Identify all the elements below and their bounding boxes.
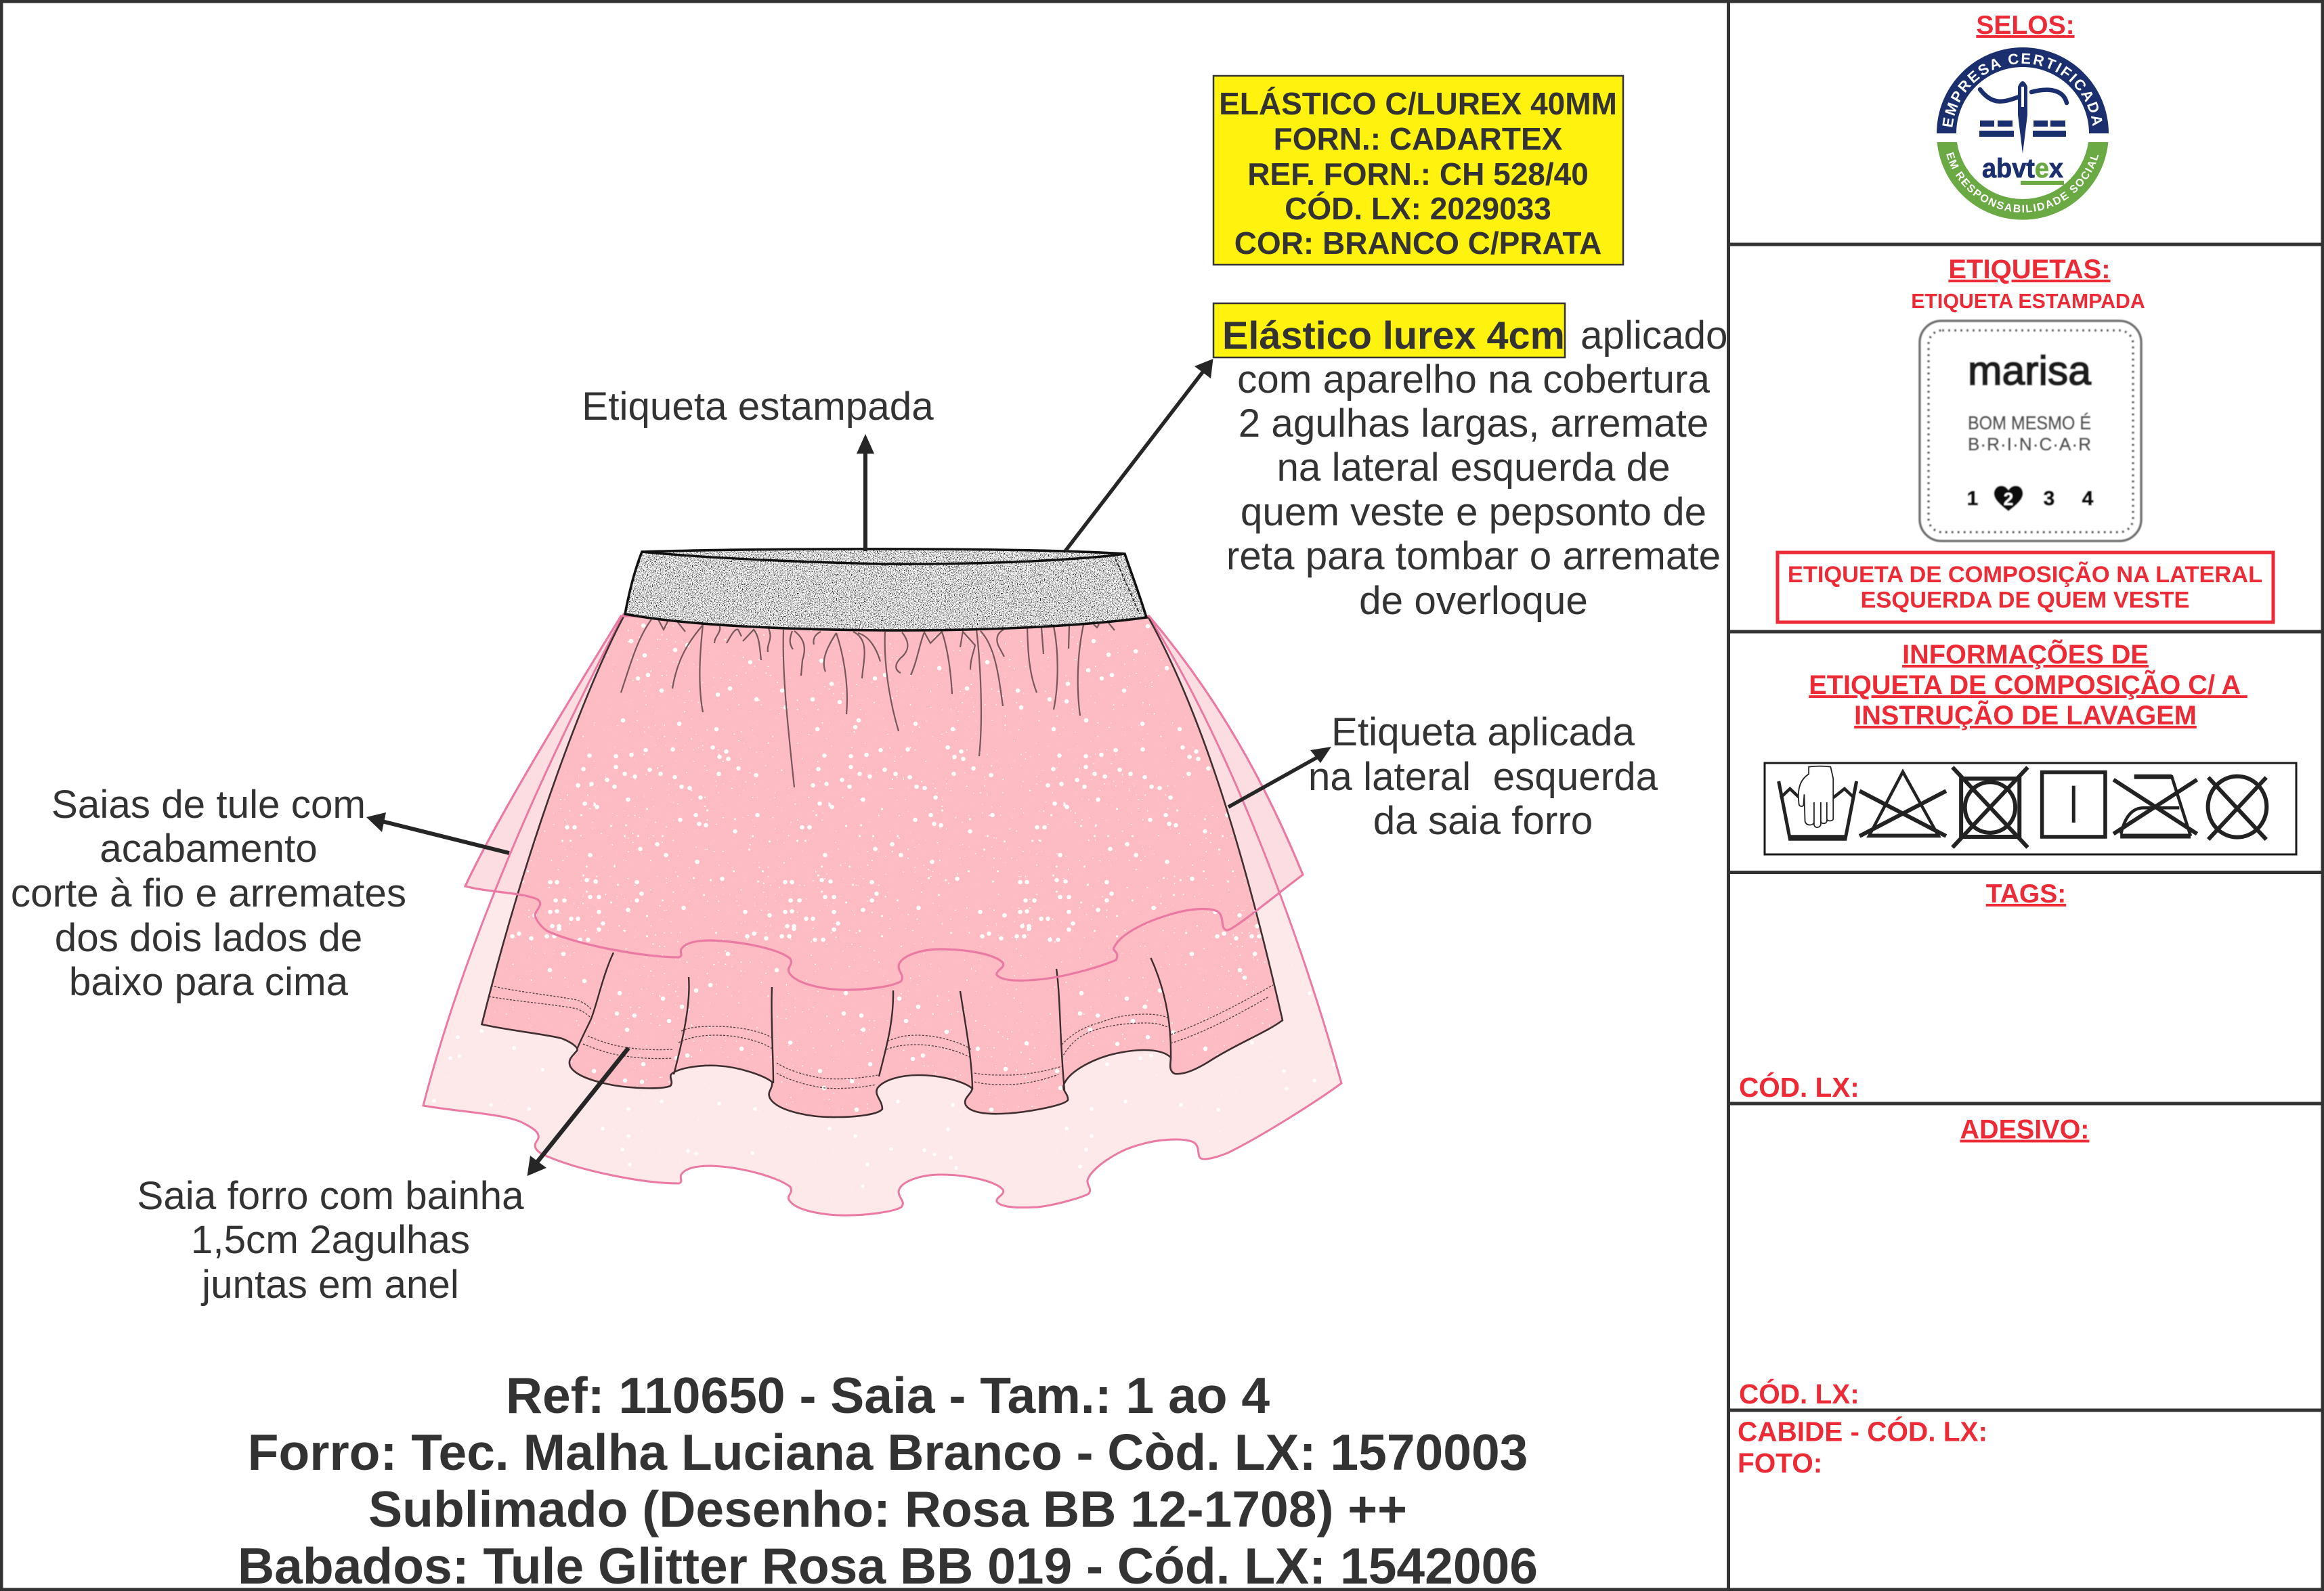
panel: etiquetas xyxy=(1778,255,2273,622)
note text: 2 agulhas largas, arremate xyxy=(1239,401,1708,445)
yellow spec box xyxy=(1213,76,1623,265)
note: saias de tule: Saias de tule com xyxy=(51,783,366,827)
yellow spec box: COR: BRANCO C/PRATA xyxy=(1234,225,1601,261)
note: saias de tule: acabamento xyxy=(100,827,318,871)
glitter print xyxy=(510,623,1262,1112)
note: saias de tule: baixo para cima xyxy=(69,960,349,1004)
icon: abvtex seal xyxy=(1937,47,2109,220)
printed label sample: B·R·I·N·C·A·R xyxy=(1968,434,2091,454)
heading: etiquetas: ETIQUETAS: xyxy=(1948,255,2111,284)
back tulle outline xyxy=(423,614,1341,1215)
panel: selos xyxy=(1937,11,2109,220)
note: saia forro: Saia forro com bainha xyxy=(137,1174,524,1218)
arrow: etiqueta estampada xyxy=(857,434,874,551)
note: etiqueta aplicada: da saia forro xyxy=(1373,799,1593,843)
yellow highlight xyxy=(1213,303,1565,357)
note text: de overloque xyxy=(1359,579,1588,623)
panel: cabide: CABIDE - CÓD. LX: xyxy=(1738,1416,1987,1447)
heading: informacoes: INFORMAÇÕES DE xyxy=(1902,640,2149,670)
composition label callout xyxy=(1778,552,2273,622)
note text: na lateral esquerda de xyxy=(1276,445,1671,489)
icon: do not iron xyxy=(2113,777,2197,836)
heading: informacoes: ETIQUETA DE COMPOSIÇÃO C/ A xyxy=(1809,670,2247,700)
note text: aplicado xyxy=(1580,313,1728,357)
icon: abvtex seal: EMPRESA CERTIFICADA xyxy=(1942,53,2102,127)
icon: no bleach xyxy=(1859,772,1946,836)
panel: tags xyxy=(1739,879,2066,1103)
printed label sample: marisa xyxy=(1968,348,2092,393)
product title block: Sublimado (Desenho: Rosa BB 12-1708) ++ xyxy=(368,1481,1407,1538)
label: etiqueta estampada: Etiqueta estampada xyxy=(582,385,934,429)
product title block: Ref: 110650 - Saia - Tam.: 1 ao 4 xyxy=(506,1367,1270,1424)
gather lines under waistband xyxy=(621,619,1115,787)
arrow: elastico lurex xyxy=(1065,359,1213,551)
heading: selos: SELOS: xyxy=(1976,11,2075,40)
tags code field: CÓD. LX: xyxy=(1739,1072,1859,1103)
note: saia forro: juntas em anel xyxy=(200,1263,459,1307)
printed label sample: 4 xyxy=(2082,487,2094,510)
upper tulle layer fill xyxy=(465,616,1303,990)
note: etiqueta aplicada: na lateral esquerda xyxy=(1308,755,1658,799)
upper tulle outline xyxy=(465,616,1303,990)
printed label sample: 3 xyxy=(2044,487,2054,510)
note: elastico lurex application xyxy=(1213,303,1728,623)
arrow: etiqueta aplicada xyxy=(1228,747,1331,807)
panel: informacoes de composicao xyxy=(1765,640,2296,854)
heading: tags: TAGS: xyxy=(1986,879,2066,909)
hem fold lines xyxy=(577,953,1171,1090)
yellow spec box: REF. FORN.: CH 528/40 xyxy=(1247,156,1589,192)
yellow spec box: FORN.: CADARTEX xyxy=(1274,121,1563,156)
note text: quem veste e pepsonto de xyxy=(1241,490,1706,534)
lining outline xyxy=(482,614,1283,1117)
icon: abvtex seal: abvtex xyxy=(1982,154,2063,183)
note: saia forro: 1,5cm 2agulhas xyxy=(191,1218,470,1262)
arrow: saia forro xyxy=(527,1048,628,1176)
icon: hand wash xyxy=(1779,766,1857,839)
skirt technical drawing xyxy=(420,542,1348,1225)
yellow spec box: ELÁSTICO C/LUREX 40MM xyxy=(1219,86,1617,121)
printed label sample: 2 xyxy=(2004,489,2013,509)
icon: line dry xyxy=(2042,772,2105,837)
adesivo code field: CÓD. LX: xyxy=(1739,1378,1859,1410)
printed label sample: 1 xyxy=(1967,487,1978,510)
printed label sample: BOM MESMO É xyxy=(1968,412,2091,433)
yellow spec box: CÓD. LX: 2029033 xyxy=(1285,191,1551,226)
care symbols box xyxy=(1765,763,2296,854)
product title block: Forro: Tec. Malha Luciana Branco - Còd. LX: 1570003 xyxy=(248,1424,1528,1481)
back tulle layer xyxy=(425,892,1341,1215)
arrow: saias de tule xyxy=(366,812,509,853)
composition label callout: ESQUERDA DE QUEM VESTE xyxy=(1860,588,2190,613)
note: saias de tule: corte à fio e arremates xyxy=(11,871,406,915)
composition label callout: ETIQUETA DE COMPOSIÇÃO NA LATERAL xyxy=(1788,561,2262,588)
pink lining skirt xyxy=(483,617,1281,1116)
icon: abvtex seal: EM RESPONSABILIDADE SOCIAL xyxy=(1946,152,2099,213)
note: saias de tule: dos dois lados de xyxy=(55,916,362,960)
note: etiqueta aplicada: Etiqueta aplicada xyxy=(1331,710,1635,754)
note text: reta para tombar o arremate xyxy=(1226,534,1721,578)
panel: adesivo xyxy=(1739,1114,2089,1410)
heading: informacoes: INSTRUÇÃO DE LAVAGEM xyxy=(1854,701,2197,731)
icon: do not dry clean xyxy=(2208,777,2266,840)
hem stitching xyxy=(489,985,1273,1089)
icon: no tumble dry xyxy=(1952,767,2027,848)
subheading: etiqueta estampada: ETIQUETA ESTAMPADA xyxy=(1911,290,2145,313)
note text: com aparelho na cobertura xyxy=(1237,357,1710,401)
printed label sample xyxy=(1920,321,2141,541)
glitter waistband xyxy=(623,548,1148,632)
heading: adesivo: ADESIVO: xyxy=(1960,1114,2089,1144)
panel: cabide: FOTO: xyxy=(1738,1447,1822,1479)
note text: Elástico lurex 4cm xyxy=(1222,314,1565,357)
